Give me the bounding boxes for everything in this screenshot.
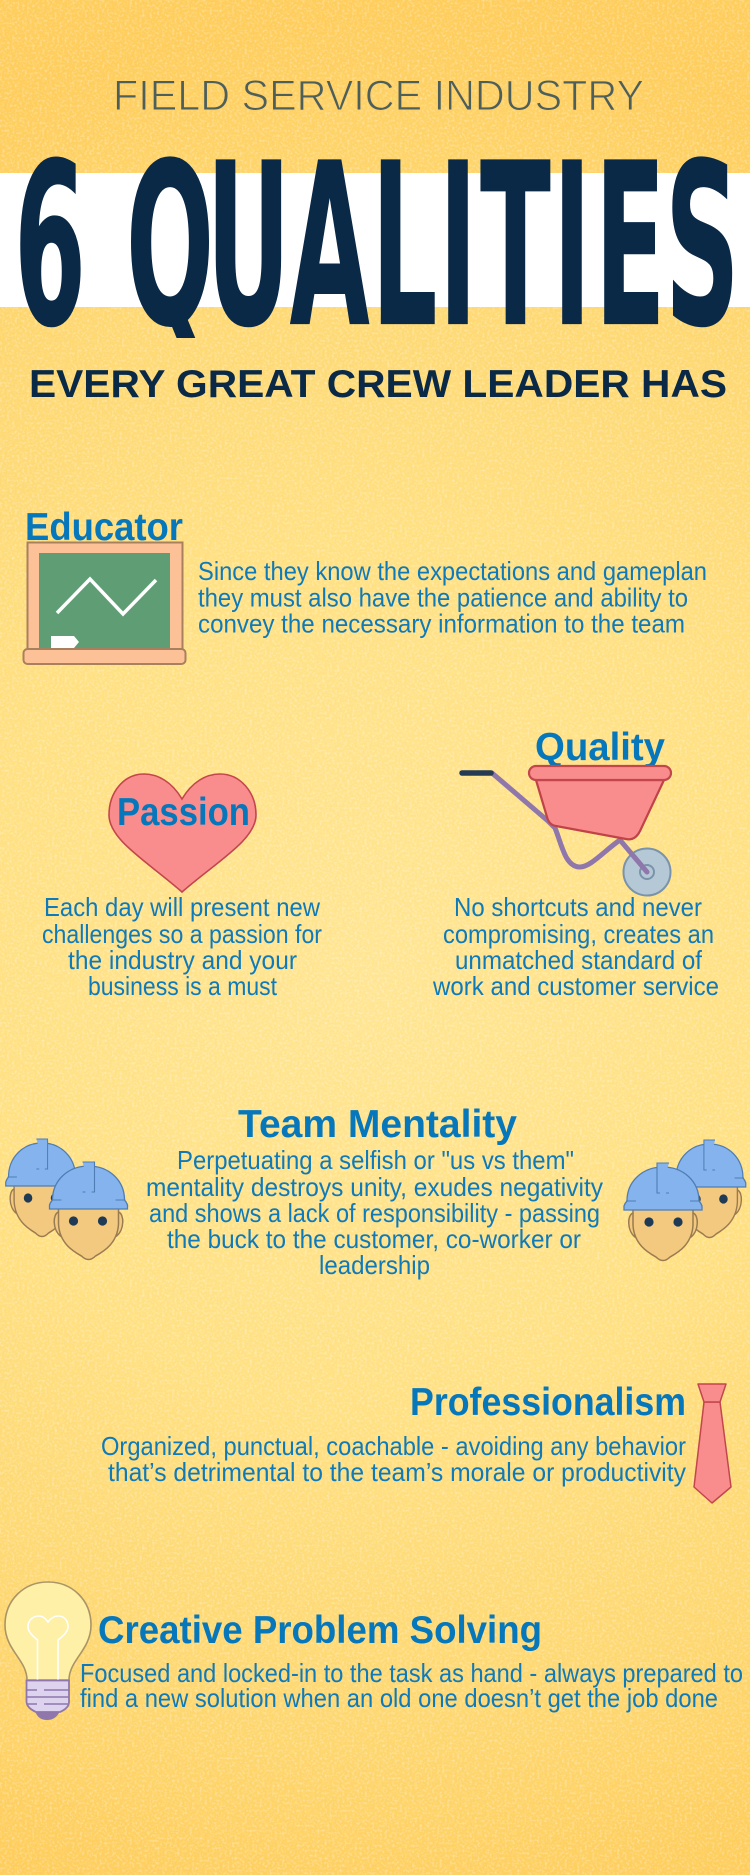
icon: wheelbarrow (462, 766, 671, 896)
text: educator description: they must also have the patience and ability to (198, 582, 688, 612)
icon: workers left (6, 1139, 128, 1260)
icon: heart (109, 774, 256, 892)
section: educator (24, 506, 707, 664)
subtitle: EVERY GREAT CREW LEADER HAS (29, 363, 727, 406)
text: quality description (432, 892, 719, 1001)
icon: workers right (624, 1140, 746, 1260)
text: team description: the buck to the customer, co-worker or (167, 1224, 581, 1254)
text: team description (146, 1145, 603, 1280)
text: passion description: Each day will present new (44, 892, 320, 922)
section: passion (42, 774, 322, 1001)
text: passion description: business is a must (88, 971, 278, 1001)
text: passion description: the industry and your (68, 945, 297, 975)
heading: professionalism: Professionalism (410, 1381, 686, 1424)
icon: tie (694, 1384, 731, 1503)
section: team mentality (6, 1103, 746, 1280)
text: educator description (198, 556, 707, 638)
text: professionalism description (101, 1431, 686, 1487)
white title band (0, 173, 750, 307)
text: team description: and shows a lack of responsibility - passing (149, 1198, 600, 1228)
heading: team mentality: Team Mentality (238, 1103, 518, 1146)
text: educator description: Since they know the expectations and gameplan (198, 556, 707, 586)
text: educator description: convey the necessary information to the team (198, 608, 685, 638)
section: creative problem solving (5, 1582, 743, 1720)
text: team description: leadership (319, 1250, 430, 1280)
text: professionalism description: Organized, punctual, coachable - avoiding any behavior (101, 1431, 686, 1461)
text: quality description: work and customer service (432, 971, 719, 1001)
icon: chalkboard (24, 542, 186, 664)
header: field service industry: FIELD SERVICE INDUSTRY (113, 72, 644, 120)
text: quality description: No shortcuts and never (454, 892, 702, 922)
text: team description: Perpetuating a selfish or "us vs them" (177, 1145, 574, 1175)
heading: quality: Quality (535, 726, 666, 769)
heading: educator: Educator (25, 506, 183, 549)
text: quality description: unmatched standard of (455, 945, 703, 975)
icon: light bulb (5, 1582, 91, 1720)
section: quality (432, 726, 719, 1001)
text: professionalism description: that’s detrimental to the team’s morale or productivity (108, 1457, 686, 1487)
text: passion description: challenges so a passion for (42, 919, 322, 949)
text: team description: mentality destroys unity, exudes negativity (146, 1172, 603, 1202)
text: creative description (80, 1658, 743, 1713)
section: professionalism (101, 1381, 731, 1503)
title: 6 qualities: 6 QUALITIES (14, 116, 740, 378)
heading: passion: Passion (117, 791, 250, 834)
text: quality description: compromising, creates an (443, 919, 714, 949)
text: passion description (42, 892, 322, 1001)
heading: creative problem solving: Creative Problem Solving (98, 1609, 542, 1652)
